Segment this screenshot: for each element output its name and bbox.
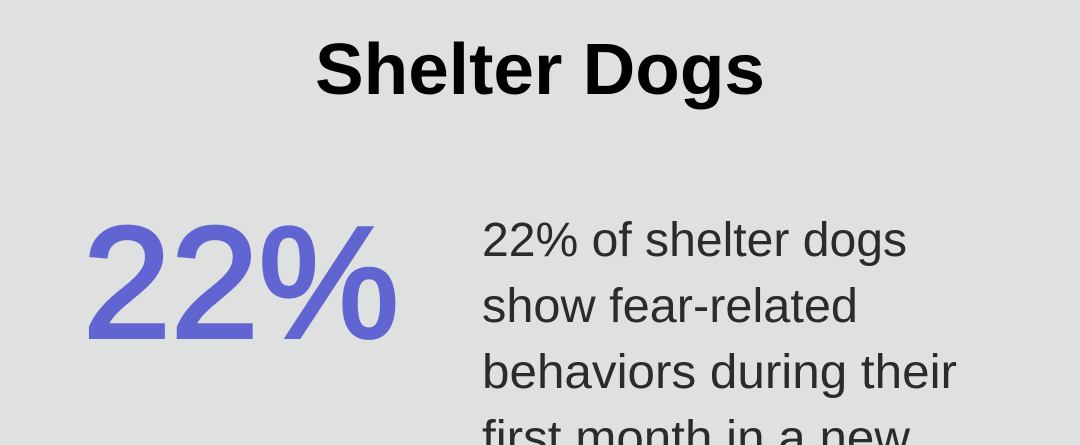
big statistic: 22% bbox=[83, 195, 399, 371]
description text bbox=[482, 214, 957, 445]
description text: behaviors during their bbox=[482, 346, 957, 399]
description text: show fear-related bbox=[482, 280, 858, 333]
title: Shelter Dogs bbox=[315, 30, 765, 110]
description text: 22% of shelter dogs bbox=[482, 214, 907, 267]
